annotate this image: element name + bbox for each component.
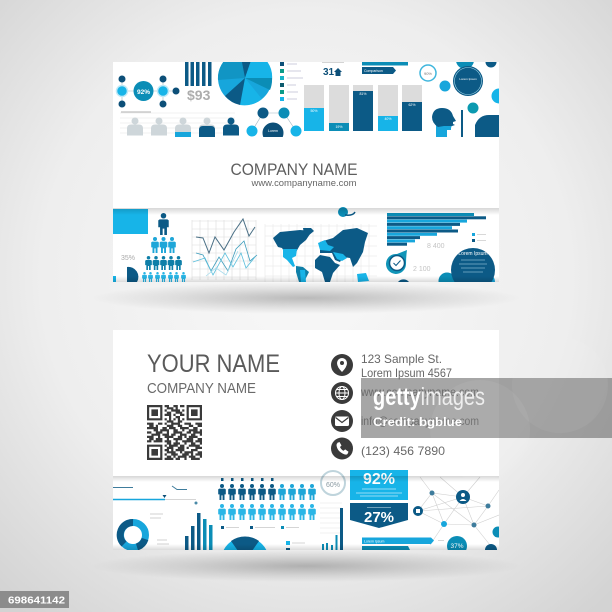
statistic 31 bbox=[322, 62, 344, 76]
icon: location pin bbox=[331, 354, 353, 376]
band shadow on back card strip bbox=[113, 476, 499, 482]
column chart: 50% bbox=[310, 109, 318, 113]
small chart with tall bar bbox=[320, 503, 343, 550]
image id tag: 698641142 bbox=[8, 594, 65, 606]
horizontal bar chart bbox=[387, 213, 486, 246]
bubbles right of top strip bbox=[419, 62, 499, 114]
ribbon bars with 37%: 37% bbox=[450, 543, 464, 550]
bar chart bbox=[185, 513, 212, 550]
percent ring 60%: 60% bbox=[326, 482, 340, 489]
statistic 31: 31 bbox=[323, 67, 335, 78]
watermark band bbox=[361, 337, 612, 480]
figures 8 400 and 2 100: 2 100 bbox=[413, 266, 431, 273]
icon: envelope bbox=[331, 410, 353, 432]
company name: COMPANY NAME bbox=[147, 380, 256, 397]
striped bars and dollar figure bbox=[185, 62, 212, 103]
watermark credit: Credit: bgblue bbox=[373, 415, 462, 429]
timeline lines bbox=[113, 486, 198, 504]
bubbles right of top strip: Lorem Ipsum bbox=[459, 77, 477, 81]
phone number: (123) 456 7890 bbox=[361, 444, 445, 458]
card bottom fade bbox=[113, 278, 499, 282]
figures 8 400 and 2 100 bbox=[413, 243, 445, 273]
ribbon bars with 37%: Lorem Ipsum bbox=[364, 540, 385, 544]
percent ring 60% bbox=[321, 471, 345, 495]
front card bbox=[113, 62, 499, 282]
half pie chart bbox=[221, 536, 305, 585]
head profile icon bbox=[432, 108, 463, 137]
address line two: Lorem Ipsum 4567 bbox=[361, 366, 452, 380]
your name heading: YOUR NAME bbox=[147, 350, 280, 378]
people grid chart bbox=[218, 478, 316, 529]
back card bbox=[113, 330, 499, 550]
image id tag bbox=[0, 591, 69, 608]
donut chart bbox=[120, 514, 169, 548]
people bar chart bbox=[120, 112, 239, 137]
line chart bbox=[192, 219, 257, 280]
blue square bbox=[113, 209, 148, 234]
shadow under front card bbox=[91, 282, 521, 314]
shadow under back card bbox=[91, 550, 521, 582]
back card bottom fade bbox=[113, 544, 499, 550]
small percent with pie: 35% bbox=[121, 255, 135, 262]
quarter pie corner bbox=[475, 115, 499, 137]
column chart: 40% bbox=[384, 117, 392, 121]
column chart: 62% bbox=[408, 103, 416, 107]
icon: globe bbox=[331, 382, 353, 404]
ribbon bars with 37% bbox=[362, 536, 467, 556]
striped bars and dollar figure: $93 bbox=[187, 87, 211, 103]
top infographic strip: circle diagram: 92% bbox=[137, 89, 150, 96]
email: info@companyname.com bbox=[361, 414, 479, 428]
check badge bbox=[386, 250, 409, 282]
pie chart bbox=[218, 62, 272, 106]
92% box bbox=[350, 470, 408, 500]
network circles: Lorem bbox=[268, 129, 278, 133]
lorem ipsum circle: Lorem Ipsum bbox=[458, 251, 488, 257]
pie legend bbox=[280, 62, 303, 101]
watermark logo: gettyimages bbox=[373, 383, 485, 411]
27% pentagon bbox=[350, 503, 408, 528]
ribbon tags: Comparison bbox=[364, 69, 383, 73]
column chart: 81% bbox=[359, 92, 367, 96]
network diagram bbox=[413, 477, 504, 556]
92% box: 92% bbox=[363, 471, 395, 488]
bubbles right of top strip: 90% bbox=[424, 71, 432, 76]
magnifier blob bbox=[338, 207, 355, 217]
people pyramid bbox=[142, 213, 186, 282]
column chart: 19% bbox=[335, 125, 343, 129]
world map bbox=[265, 224, 377, 282]
QR code bbox=[147, 405, 202, 460]
small percent with pie bbox=[113, 255, 138, 282]
figures 8 400 and 2 100: 8 400 bbox=[427, 243, 445, 250]
top infographic strip: circle diagram bbox=[116, 76, 180, 108]
lorem ipsum circle bbox=[438, 248, 495, 282]
website: www.companyname.com bbox=[360, 385, 479, 399]
address text: 123 Sample St. bbox=[361, 352, 442, 366]
website url: www.companyname.com bbox=[251, 178, 357, 189]
icon: phone bbox=[331, 438, 353, 460]
column chart bbox=[304, 85, 422, 131]
white name band bbox=[231, 137, 357, 175]
27% pentagon: 27% bbox=[364, 509, 394, 526]
band shadow on lower strip bbox=[113, 208, 499, 214]
ribbon tags bbox=[362, 62, 408, 74]
network circles bbox=[246, 108, 302, 137]
bar legend bbox=[472, 233, 486, 242]
company name heading: COMPANY NAME bbox=[230, 160, 358, 179]
